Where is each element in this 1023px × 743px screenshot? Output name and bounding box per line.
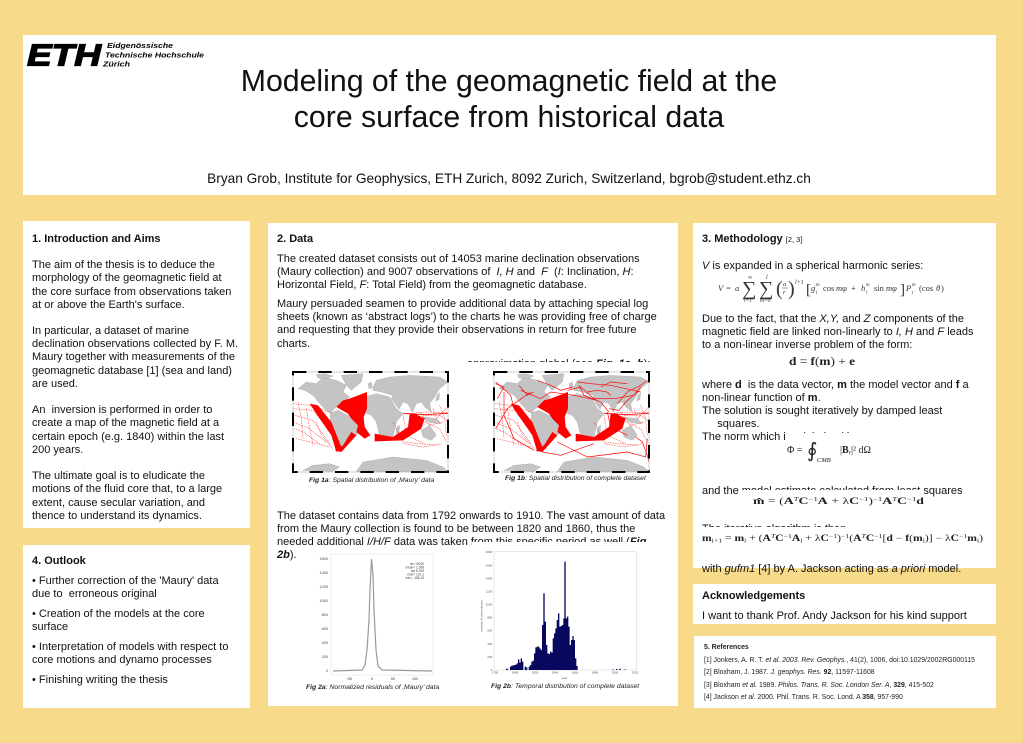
- caption: Fig 2b: Fig 2b: Temporal distribution of complete dataset: [491, 683, 639, 690]
- equation: model estimate: C: [799, 497, 809, 507]
- chart: Fig 2a histogram: 50: [391, 677, 395, 681]
- equation: spherical harmonic series: ): [788, 278, 795, 300]
- equation: spherical harmonic series: +: [851, 283, 856, 293]
- equation: model estimate: A: [818, 497, 828, 507]
- panel: acknowledgements: [693, 584, 996, 624]
- chart: Fig 2a histogram: −50: [346, 677, 352, 681]
- map: Fig 1a: [292, 371, 449, 473]
- equation: spherical harmonic series: V: [718, 283, 725, 293]
- chart: Fig 2a histogram: 0: [326, 669, 328, 673]
- chart: Fig 2b histogram: number of observations: [479, 600, 483, 632]
- chart: Fig 2b histogram: 1400: [486, 576, 493, 580]
- text: data paragraph 2: The dataset contains data from 1792 onwards to 1910. The vast amount of data from the Maury collection is found to be between 1820 and 1860, thus the needed additional I/H/F data was taken from this specific period as well (Fig. 2b).: [277, 510, 665, 561]
- chart: Fig 2a histogram: 800: [322, 613, 328, 617]
- equation: norm: CMB: [817, 457, 831, 464]
- chart: Fig 2b histogram: 1880: [592, 671, 599, 675]
- equation: model estimate: −1: [873, 497, 882, 503]
- equation: norm: ∮: [807, 440, 817, 462]
- equation: spherical harmonic series: mφ: [886, 283, 897, 293]
- equation: spherical harmonic series: l=1: [744, 298, 752, 304]
- equation: spherical harmonic series: ): [941, 283, 944, 293]
- equation: iteration: i: [923, 538, 925, 544]
- equation: model estimate: d: [916, 497, 925, 507]
- chart: Fig 2a histogram: len 10000: [410, 562, 424, 566]
- equation: model estimate: −1: [859, 497, 868, 503]
- equation: iteration: ): [837, 533, 841, 543]
- panel: methodology: [693, 223, 996, 568]
- chart: Fig 2b histogram: 1920: [632, 671, 639, 675]
- logo: ETH: [26, 38, 204, 72]
- equation: iteration: −1: [784, 534, 792, 540]
- equation: spherical harmonic series: =: [726, 283, 731, 293]
- chart: Fig 2b histogram: 1000: [486, 603, 493, 607]
- equation: spherical harmonic series: l: [866, 291, 868, 296]
- panel: references: [694, 636, 996, 708]
- equation: spherical harmonic series: ∞: [748, 275, 752, 281]
- equation: spherical harmonic series: l: [912, 291, 914, 296]
- chart: Fig 2b histogram: 1780: [492, 671, 499, 675]
- equation: model estimate: −1: [907, 497, 916, 503]
- equation: iteration: A: [792, 533, 801, 543]
- equation: model estimate: C: [897, 497, 907, 507]
- equation: spherical harmonic series: m=0: [760, 298, 771, 304]
- equation: spherical harmonic series: r: [783, 289, 786, 296]
- equation: iteration: T: [771, 534, 776, 540]
- equation: model estimate: + λ C: [830, 497, 856, 507]
- equation: model estimate: −1: [809, 497, 818, 503]
- equation: iteration: −1: [874, 534, 883, 540]
- logo: ETH: Eidgenössische: [107, 41, 173, 50]
- text: definitions: where d is the data vector, m the model vector and f a non-linear function of m. The solution is sought iteratively by damped least squares. The norm which is minimized is: [702, 378, 969, 443]
- equation: iteration: C: [951, 533, 959, 543]
- equation: norm: [786, 433, 871, 464]
- equation: iteration: ): [979, 533, 983, 543]
- text: gufm1: with gufm1 [4] by A. Jackson acting as a priori model.: [702, 562, 961, 574]
- equation: iteration: C: [821, 533, 829, 543]
- equation: spherical harmonic series: mφ: [836, 283, 847, 293]
- equation: iteration: i: [744, 538, 747, 544]
- chart: Fig 2b histogram: 800: [487, 616, 493, 620]
- equation: iteration: + λ: [802, 533, 821, 543]
- text: references: 5. References [1] Jonkers, A. R. T. et al. 2003. Rev. Geophys., 41(2), 1006, doi:10.1029/2002RG000115 [2] Bloxham, J. 1987. J. geophys. Res. 92, 11597-11608 [3] Bloxham et al. 1989. Philos. Trans. R. Soc. London Ser. A, 329, 415-502 [4] Jackson et al. 2000. Phil. Trans. R. Soc. Lond. A 358, 957-990: [704, 644, 975, 701]
- equation: spherical harmonic series: θ: [936, 283, 940, 293]
- chart: Fig 2a histogram: 600: [322, 627, 328, 631]
- equation: iteration: −1: [829, 534, 837, 540]
- image mask 2: [472, 542, 652, 556]
- caption: Fig 1a: Fig 1a: Spatial distribution of ‚Maury’ data: [309, 477, 434, 484]
- chart: Fig 2a histogram: 1400: [320, 571, 328, 575]
- equation: spherical harmonic series: a: [783, 281, 786, 288]
- chart: Fig 2a histogram: [320, 554, 434, 681]
- panel: outlook: [23, 545, 250, 708]
- chart: Fig 2b histogram: 1860: [572, 671, 579, 675]
- equation: spherical harmonic series: ]: [900, 282, 905, 298]
- text: model estimate: and the model estimate calculated from least squares: [702, 484, 962, 496]
- equation: spherical harmonic series: l: [766, 275, 768, 281]
- chart: Fig 2a histogram: 1200: [320, 585, 328, 589]
- chart: Fig 2b histogram: [479, 550, 639, 680]
- text: clipped line: approximation global (see Fig. 1a, b):: [467, 358, 650, 370]
- caption: Fig 2a: Fig 2a: Normalized residuals of ‚Maury’ data: [306, 684, 439, 691]
- text: methodology heading: 3. Methodology [2, 3]: [702, 233, 802, 245]
- chart: Fig 2a histogram: std 8.263: [411, 569, 424, 573]
- equation: iteration: T: [862, 534, 867, 540]
- chart: Fig 2b histogram: 400: [487, 642, 493, 646]
- equation: model estimate: A: [882, 497, 892, 507]
- chart: Fig 2b histogram: 1840: [552, 671, 559, 675]
- chart: Fig 2a histogram: 1000: [320, 599, 328, 603]
- equation: model estimate: T: [794, 497, 800, 503]
- text: acknowledgements: Acknowledgements I want to thank Prof. Andy Jackson for his kind support: [702, 590, 967, 622]
- heading: data: 2. Data: [277, 233, 313, 245]
- equation: iteration: i+1: [712, 538, 722, 544]
- equation: iteration: C: [775, 533, 784, 543]
- text: outlook: 4. Outlook • Further correction of the 'Maury' data due to erroneous original • Creation of the models at the core surface • Interpretation of models with respect to core motions and dynamo processes • Finishing writing the thesis: [32, 555, 228, 686]
- equation: model estimate: m̂ = ( A: [753, 497, 791, 507]
- panel: header: [23, 35, 996, 195]
- panel: introduction: [23, 221, 250, 528]
- equation: iteration: A: [853, 533, 862, 543]
- equation: model estimate: T: [892, 497, 898, 503]
- equation: iteration: )] − λ: [925, 533, 951, 543]
- equation: iteration: + (: [746, 533, 763, 543]
- equation: model estimate: ): [868, 496, 873, 507]
- equation: norm: r: [849, 450, 852, 456]
- text: iterative algorithm: The iterative algorithm is then: [702, 523, 846, 535]
- title: [241, 65, 777, 134]
- equation: iteration: i: [977, 538, 980, 544]
- logo: ETH: Technische Hochschule: [105, 50, 204, 60]
- equation: spherical harmonic series: m: [816, 283, 820, 288]
- equation: spherical harmonic series: g: [811, 283, 815, 293]
- equation: iteration: m: [702, 533, 712, 543]
- chart: Fig 2b histogram: 1800: [486, 550, 493, 554]
- equation: norm: Φ =: [787, 445, 803, 456]
- text: spherical harmonic intro: V is expanded in a spherical harmonic series:: [702, 260, 923, 272]
- equation: spherical harmonic series: l+1: [795, 280, 804, 286]
- logo: ETH: ETH: [27, 38, 102, 72]
- equation: spherical harmonic series: h: [861, 283, 865, 293]
- equation: iteration: m: [967, 533, 978, 543]
- chart: Fig 2b histogram: 1900: [612, 671, 619, 675]
- equation: spherical harmonic series: (: [776, 278, 783, 300]
- panel: data: [268, 223, 678, 706]
- equation: spherical harmonic series: l: [816, 291, 818, 296]
- chart: Fig 2b histogram: 600: [487, 629, 493, 633]
- equation: norm: |² dΩ: [851, 445, 871, 456]
- equation: spherical harmonic series: m: [866, 283, 870, 288]
- chart: Fig 2b histogram: 200: [487, 655, 493, 659]
- equation: iteration: i: [800, 538, 803, 544]
- equation: spherical harmonic series: ∑: [742, 278, 756, 300]
- image mask: [285, 362, 665, 370]
- chart: Fig 2a histogram: 100: [412, 677, 418, 681]
- equation: spherical harmonic series: P: [905, 283, 911, 293]
- caption: Fig 1b: Fig 1b: Spatial distribution of complete dataset: [505, 475, 646, 482]
- equation: spherical harmonic series: [718, 274, 944, 304]
- chart: Fig 2b histogram: 1800: [512, 671, 519, 675]
- equation: iteration: =: [722, 533, 734, 543]
- equation: iteration: m: [734, 533, 745, 543]
- title: Modeling of the geomagnetic field at the: [241, 65, 777, 98]
- title: core surface from historical data: [294, 101, 724, 134]
- equation: iteration: d − f(m: [886, 533, 921, 543]
- equation: iteration: −1: [841, 534, 849, 540]
- equation: spherical harmonic series: a: [735, 283, 739, 293]
- chart: Fig 2a histogram: 0: [371, 677, 373, 681]
- chart: Fig 2b histogram: 1200: [486, 589, 493, 593]
- equation: spherical harmonic series: sin: [874, 283, 885, 293]
- chart: Fig 2a histogram: mean= 1.398: [405, 566, 424, 570]
- equation: iteration: [702, 527, 983, 544]
- text: nonlinearity: Due to the fact, that the X,Y, and Z components of the magnetic field are linked non-linearly to I, H and F leads to a non-linear inverse problem of the form:: [702, 312, 974, 351]
- logo: ETH: Zürich: [102, 60, 131, 68]
- chart: Fig 2a histogram: max= 131.1: [407, 572, 424, 576]
- equation: spherical harmonic series: (cos: [919, 283, 933, 293]
- equation: spherical harmonic series: m: [912, 283, 916, 288]
- equation: iteration: −1: [959, 534, 967, 540]
- text: introduction and aims: 1. Introduction and Aims The aim of the thesis is to deduce the morphology of the geomagnetic field at the core surface from observations taken at or above the Earth's surface. In particular, a dataset of marine declination observations collected by F. M. Maury together with measurements of the geomagnetic database [1] (sea and land) are used. An inversion is performed in order to create a map of the magnetic field at a certain epoch (e.g. 1840) within the last 200 years. The ultimate goal is to eludicate the motions of the fluid core that, to a large extent, cause secular variation, and thence to understand its dynamics.: [32, 233, 238, 522]
- chart: Fig 2a histogram: 200: [322, 655, 328, 659]
- text: data paragraphs: The created dataset consists out of 14053 marine declination observations (Maury collection) and 9007 observations of I, H and F (I: Inclination, H: Horizontal Field, F: Total Field) from the geomagnetic database. Maury persuaded seamen to provide additional data by attaching special log sheets (known as ‘abstract logs’) to the charts he was providing free of charge and requesting that they provide their observations in return for free future charts.: [277, 252, 657, 350]
- equation: model estimate: [742, 490, 925, 507]
- chart: Fig 2b histogram: year: [561, 676, 567, 680]
- chart: Fig 2a histogram: min= -185.18: [405, 576, 424, 580]
- equation: iteration: [: [883, 533, 886, 543]
- chart: Fig 2b histogram: 1600: [486, 563, 493, 567]
- equation: norm: |B: [840, 445, 849, 456]
- equation: iteration: A: [763, 533, 772, 543]
- chart: Fig 2a histogram: 400: [322, 641, 328, 645]
- equation: iteration: (: [849, 533, 853, 543]
- equation: spherical harmonic series: [: [806, 282, 811, 298]
- chart: Fig 2b histogram: 0: [491, 668, 493, 672]
- chart: Fig 2a histogram: 1600: [320, 557, 328, 561]
- equation: d = f(m) + e: d = f(m) + e: [789, 356, 855, 368]
- equation: spherical harmonic series: cos: [823, 283, 834, 293]
- equation: spherical harmonic series: ∑: [759, 278, 773, 300]
- chart: Fig 2b histogram: 1820: [532, 671, 539, 675]
- map: Fig 1b: [493, 371, 650, 473]
- equation: iteration: C: [866, 533, 874, 543]
- author line: Bryan Grob, Institute for Geophysics, ETH Zurich, 8092 Zurich, Switzerland, bgrob@student.ethz.ch: [207, 171, 811, 186]
